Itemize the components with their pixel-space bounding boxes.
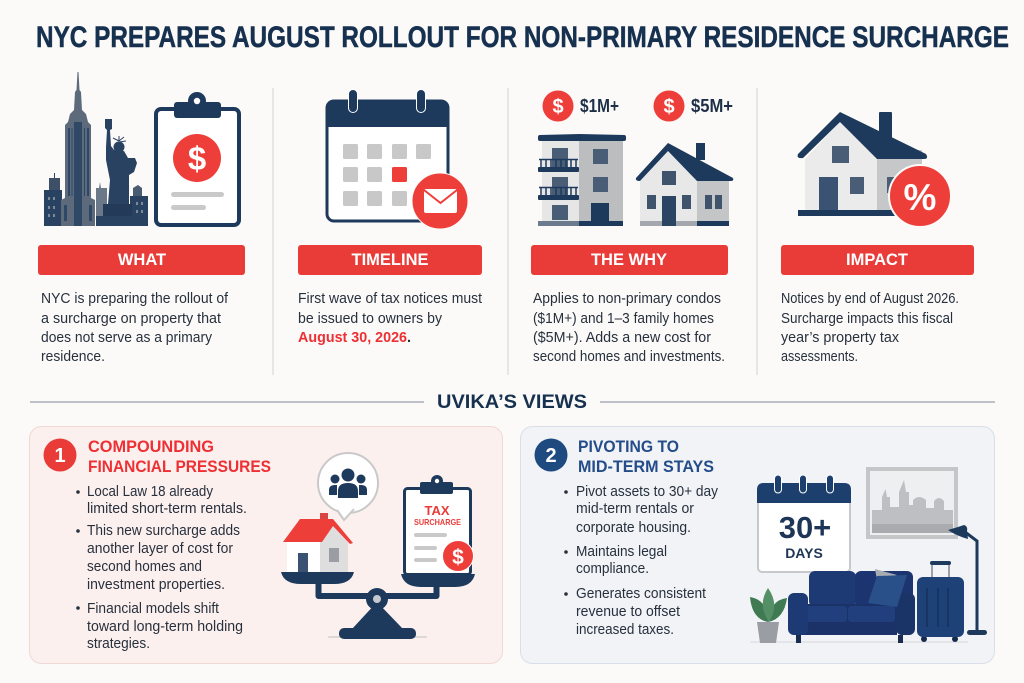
panel: pivoting to mid-term stays	[520, 426, 994, 664]
panel heading: FINANCIAL PRESSURES	[88, 457, 271, 476]
heading: the why	[531, 245, 728, 275]
bullet list: toward long-term holding	[87, 619, 243, 635]
heading: timeline: TIMELINE	[352, 251, 428, 269]
icon: price badges: $	[663, 96, 675, 118]
house	[283, 513, 353, 572]
text: what: residence.	[41, 349, 105, 365]
icon: floor shadow	[750, 641, 968, 643]
icon: price badges: $1M+	[580, 96, 619, 116]
bullet list: Generates consistent	[576, 586, 706, 602]
badge: 1: 1	[54, 445, 66, 467]
icon: calendar 30+ days: 30+	[779, 510, 831, 545]
text: the why	[533, 291, 725, 365]
icon: price badges	[542, 90, 733, 122]
text: impact: Notices by end of August 2026.	[781, 291, 959, 307]
section heading: Uvika's views: UVIKA’S VIEWS	[437, 392, 587, 413]
bullet list	[564, 484, 719, 638]
text: timeline	[298, 291, 482, 346]
heading: impact: IMPACT	[846, 251, 908, 269]
panel heading	[578, 437, 714, 476]
icon: house with percent	[798, 112, 951, 227]
heading: what	[38, 245, 245, 275]
heading: timeline	[298, 245, 482, 275]
bullet list	[76, 484, 247, 652]
text: impact: Surcharge impacts this fiscal	[781, 311, 953, 327]
bullet list: revenue to offset	[576, 604, 680, 620]
bullet list: second homes and	[87, 559, 202, 575]
icon: calendar with envelope	[326, 90, 468, 229]
icon: floor lamp	[948, 525, 987, 635]
icon: suitcase	[917, 561, 964, 642]
icon: single family house	[636, 143, 733, 226]
heading: what: WHAT	[118, 251, 166, 269]
icon: clipboard with dollar	[156, 92, 239, 225]
text: timeline: be issued to owners by	[298, 311, 443, 327]
text: impact: assessments.	[781, 349, 858, 365]
text: the why: ($5M+). Adds a new cost for	[533, 330, 711, 346]
icon: NYC skyline	[44, 72, 148, 226]
bullet list: This new surcharge adds	[87, 523, 240, 539]
text: what	[41, 291, 229, 365]
bullet list: compliance.	[576, 561, 649, 577]
text: the why: ($1M+) and 1–3 family homes	[533, 311, 714, 327]
bullet list: investment properties.	[87, 577, 225, 593]
text: timeline: First wave of tax notices must	[298, 291, 482, 307]
badge: 2: 2	[545, 445, 557, 467]
text: timeline: August 30, 2026	[298, 330, 407, 346]
icon: condo building	[538, 134, 626, 226]
bullet list: Financial models shift	[87, 601, 219, 617]
clipboard: tax surcharge: SURCHARGE	[414, 517, 461, 527]
text: timeline: .	[407, 330, 411, 346]
text: impact	[781, 291, 959, 365]
clipboard: tax surcharge: TAX	[424, 503, 450, 518]
panel heading: COMPOUNDING	[88, 437, 214, 456]
text: what: does not serve as a primary	[41, 330, 213, 346]
bullet list: corporate housing.	[576, 520, 691, 536]
icon: scale with house and tax clipboard	[281, 453, 475, 639]
icon: price badges: $5M+	[691, 96, 733, 116]
text: what: NYC is preparing the rollout of	[41, 291, 229, 307]
bullet list: strategies.	[87, 636, 150, 652]
heading: impact	[781, 245, 974, 275]
clipboard: tax surcharge: $	[452, 546, 464, 569]
icon: dollar badge: $	[188, 140, 206, 177]
badge: 1	[44, 438, 76, 472]
icon: calendar 30+ days: DAYS	[785, 545, 823, 561]
icon: price badges: $	[552, 96, 564, 118]
bullet list: another layer of cost for	[87, 541, 233, 557]
icon: sofa	[788, 569, 915, 643]
panel heading: MID-TERM STAYS	[578, 457, 714, 476]
bullet list: mid-term rentals or	[576, 501, 694, 517]
text: impact: year’s property tax	[781, 330, 900, 346]
heading: the why: THE WHY	[591, 251, 667, 269]
clipboard: tax surcharge	[404, 475, 474, 574]
speech bubble: people	[318, 453, 378, 520]
text: the why: second homes and investments.	[533, 349, 725, 365]
panel heading: PIVOTING TO	[578, 437, 679, 456]
icon: potted plant	[750, 588, 787, 643]
bullet list: limited short-term rentals.	[87, 501, 247, 517]
icon: framed skyline picture	[868, 469, 956, 537]
badge: 2	[534, 438, 568, 472]
bullet list: Pivot assets to 30+ day	[576, 484, 719, 500]
text: what: a surcharge on property that	[41, 311, 221, 327]
panel: compounding financial pressures	[30, 426, 502, 664]
text: the why: Applies to non-primary condos	[533, 291, 721, 307]
bullet list: Local Law 18 already	[87, 484, 214, 500]
bullet list: Maintains legal	[576, 544, 667, 560]
icon: calendar 30+ days	[757, 475, 851, 572]
icon: house with percent: %	[904, 177, 936, 218]
panel heading	[88, 437, 271, 476]
bullet list: increased taxes.	[576, 622, 674, 638]
